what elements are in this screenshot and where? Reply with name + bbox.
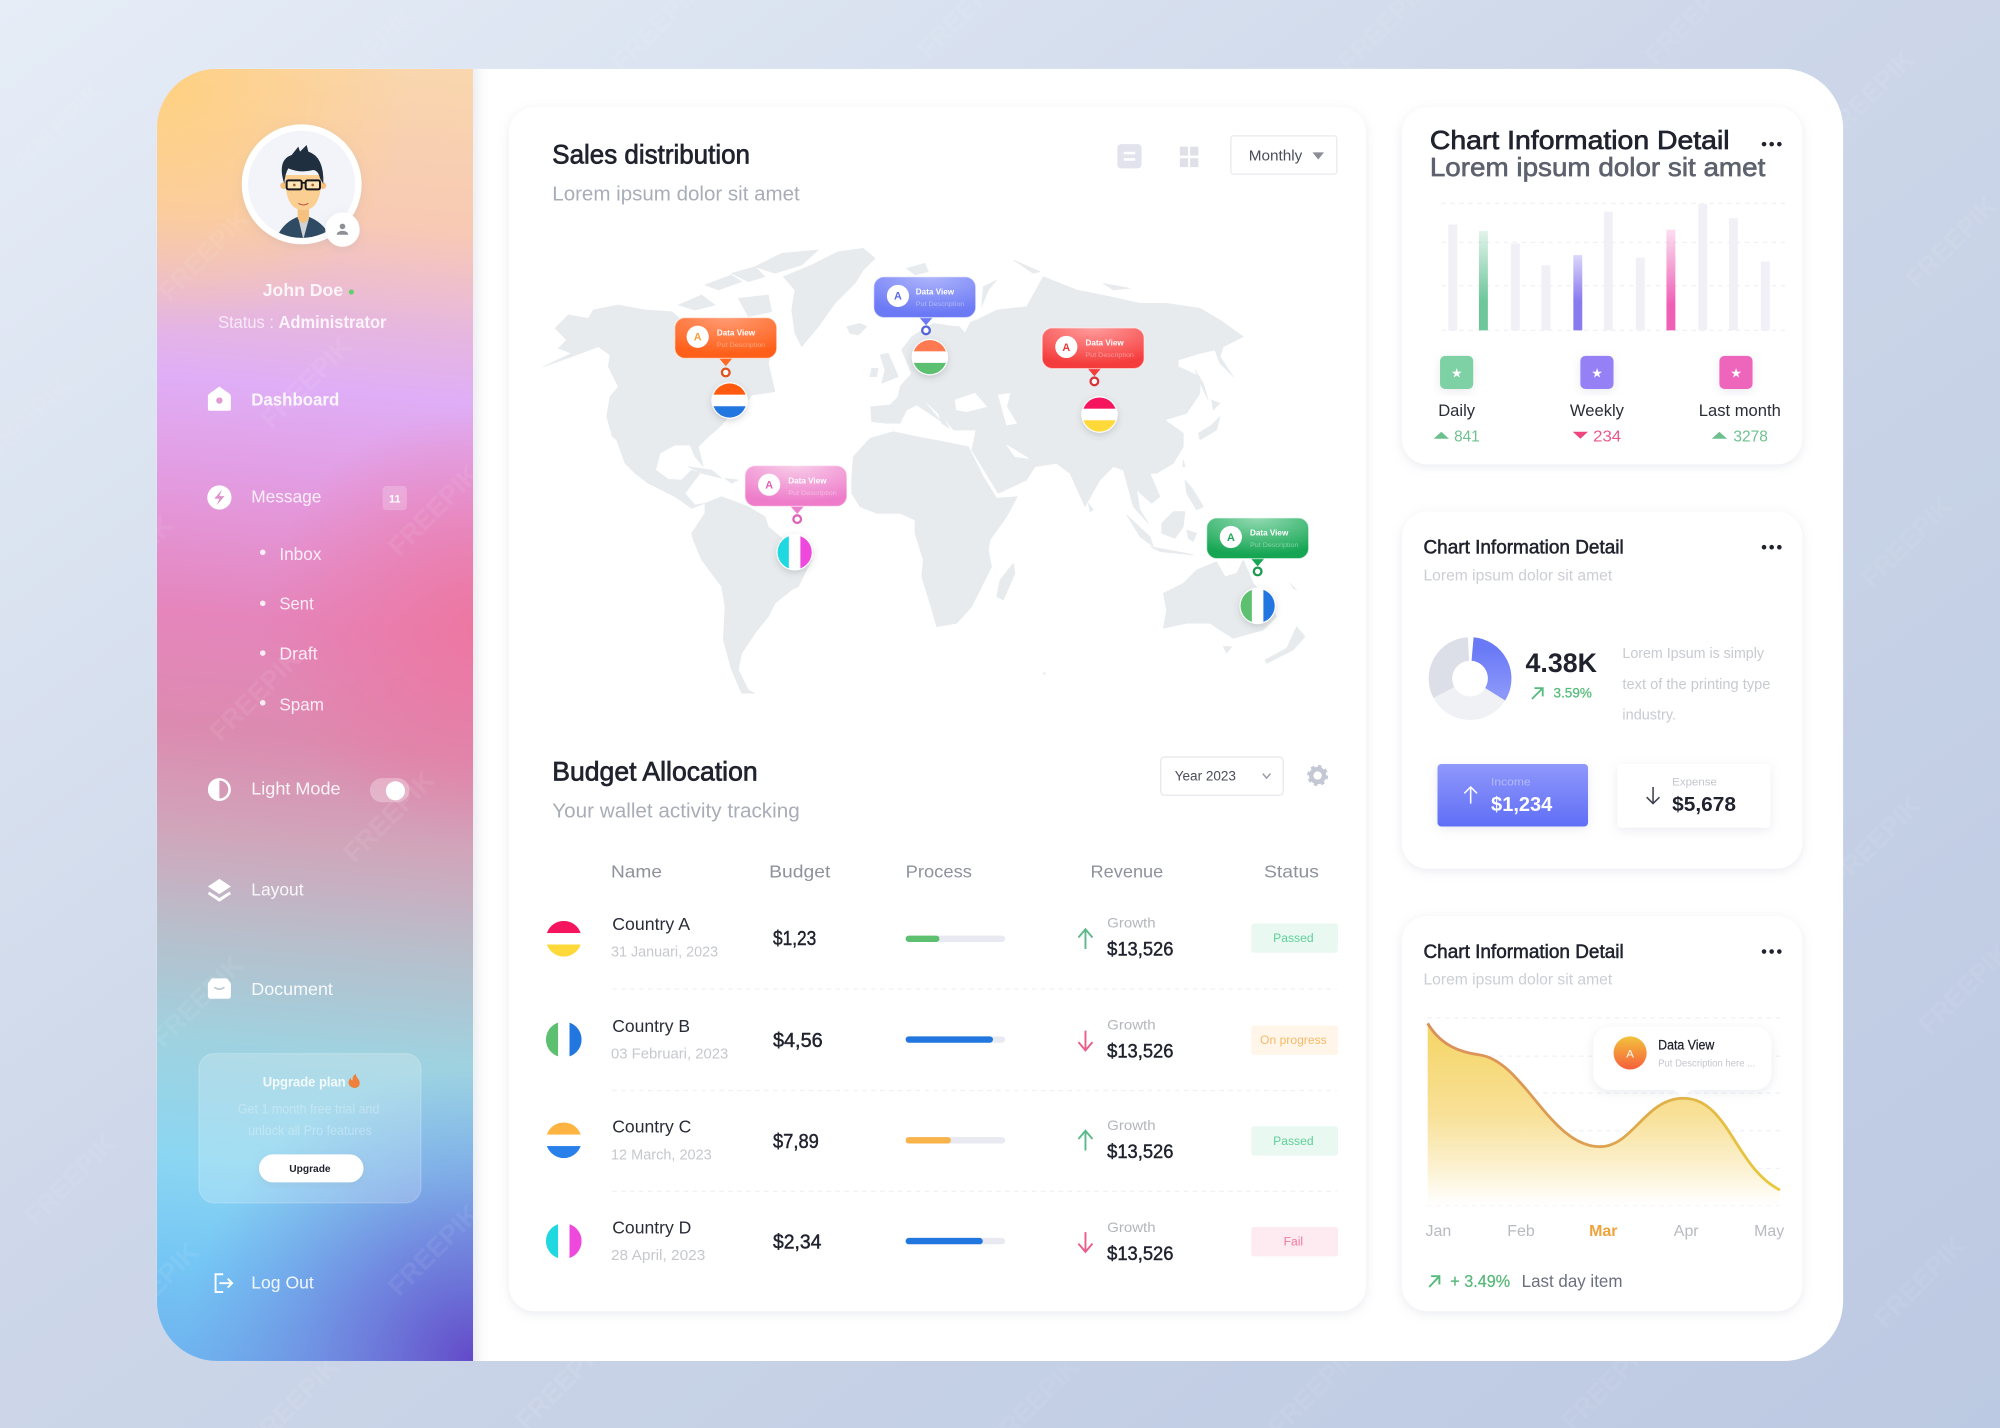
chart tooltip: Data View — [1658, 1038, 1715, 1053]
growth summary — [1429, 1271, 1622, 1291]
legend: last month — [1699, 356, 1781, 445]
table dividers — [612, 989, 1337, 1191]
map pin: orange: Put Description — [717, 342, 766, 349]
donut description — [1622, 646, 1770, 723]
sidebar edge shadow — [473, 69, 491, 1361]
panel: bar chart card — [1402, 107, 1802, 464]
icon: more dots — [1762, 545, 1782, 549]
sidebar — [157, 69, 474, 1361]
monthly dropdown — [1231, 136, 1337, 174]
area card title: Chart Information Detail — [1423, 942, 1624, 963]
nav: layout — [208, 879, 304, 902]
table row: country B — [546, 1020, 1338, 1060]
income button: Income — [1491, 777, 1531, 789]
map pin: pink — [745, 466, 847, 571]
table row: country B: Growth — [1107, 1016, 1156, 1032]
watermark pattern: FREEPIK — [6, 75, 110, 179]
watermark pattern: FREEPIK — [318, 0, 422, 103]
table header: Budget — [769, 862, 830, 882]
map pin: pink: Put Description — [788, 490, 837, 497]
chart tooltip: Put Description here ... — [1658, 1058, 1755, 1069]
table row: country B: $13,526 — [1107, 1041, 1173, 1062]
nav: message: 11 — [389, 494, 400, 506]
table row: country B: Country B — [612, 1016, 690, 1036]
table row: country A: $1,23 — [773, 928, 816, 950]
nav: document: Document — [251, 979, 333, 999]
area chart — [1427, 1018, 1782, 1205]
icon: list view — [1117, 144, 1142, 168]
donut description: industry. — [1622, 707, 1676, 723]
panel: area chart card — [1402, 916, 1802, 1311]
growth summary: Last day item — [1522, 1271, 1622, 1291]
table row: country D: Fail — [1284, 1235, 1303, 1249]
growth summary: + 3.49% — [1450, 1271, 1510, 1291]
heading: sales distribution: Sales distribution — [552, 139, 750, 169]
avatar — [242, 124, 362, 244]
table row: country D: $13,526 — [1107, 1244, 1173, 1265]
legend: daily: ★ — [1451, 366, 1462, 381]
map pin: blue — [874, 277, 976, 375]
upgrade plan card: Get 1 month free trial and — [238, 1102, 379, 1117]
panel: donut card — [1402, 511, 1802, 869]
table row: country A: Growth — [1107, 914, 1156, 930]
map pin: red: Put Description — [1085, 352, 1134, 359]
sidebar: FREEPIK — [255, 331, 358, 434]
legend: daily: 841 — [1454, 428, 1480, 445]
nav: dashboard — [208, 386, 339, 411]
upgrade plan card: Upgrade plan — [263, 1075, 346, 1090]
bar card subtitle: Lorem ipsum dolor sit amet — [1430, 152, 1766, 182]
expense button — [1617, 764, 1770, 828]
x-axis months: Apr — [1674, 1223, 1699, 1240]
table row: country B: $4,56 — [773, 1030, 823, 1052]
table row: country D: Country D — [612, 1217, 691, 1237]
table row: country B: 03 Februari, 2023 — [611, 1047, 728, 1063]
map pin: green: Data View — [1250, 528, 1289, 538]
table row: country C: $13,526 — [1107, 1142, 1173, 1163]
nav: message sub-items — [260, 544, 324, 714]
map pin: orange: Data View — [717, 327, 756, 337]
table header: Process — [906, 862, 972, 882]
legend: last month: ★ — [1730, 366, 1742, 381]
map pin: blue: Data View — [916, 287, 955, 297]
legend: weekly: ★ — [1591, 366, 1603, 381]
income button: $1,234 — [1491, 794, 1553, 816]
watermark pattern: FREEPIK — [1817, 44, 1921, 147]
map pin: green: A — [1227, 532, 1235, 544]
sidebar: FREEPIK — [337, 764, 441, 868]
watermark pattern: FREEPIK — [1855, 490, 1959, 594]
watermark pattern: FREEPIK — [19, 1128, 122, 1231]
main white panel — [157, 69, 1843, 1361]
upgrade plan card: unlock all Pro features — [248, 1123, 372, 1138]
table row: country A: 31 Januari, 2023 — [611, 945, 718, 961]
donut value: 4.38K — [1526, 648, 1598, 678]
icon: more dots — [1762, 142, 1782, 146]
sidebar: FREEPIK — [203, 643, 307, 747]
nav: light mode: Light Mode — [251, 779, 341, 799]
nav: document — [208, 978, 333, 999]
nav: message sub-items: Spam — [279, 694, 324, 714]
table header: Status — [1264, 862, 1319, 882]
table row: country D: 28 April, 2023 — [611, 1248, 705, 1264]
sidebar: FREEPIK — [382, 1198, 486, 1302]
sales subheading: Lorem ipsum dolor sit amet — [552, 183, 800, 205]
map pin: orange — [675, 318, 777, 419]
icon: grid view — [1180, 147, 1198, 167]
expense button: $5,678 — [1672, 794, 1736, 816]
x-axis months: May — [1754, 1223, 1784, 1240]
legend: last month: 3278 — [1733, 428, 1768, 445]
table row: country A: Passed — [1273, 931, 1314, 945]
x-axis months: Jan — [1426, 1223, 1451, 1240]
legend: last month: Last month — [1699, 401, 1781, 420]
map pin: pink: A — [765, 480, 773, 492]
watermark pattern: FREEPIK — [1868, 1230, 1972, 1334]
map pin: orange: A — [694, 332, 702, 344]
budget subheading: Your wallet activity tracking — [552, 801, 800, 823]
table header: Revenue — [1091, 862, 1163, 882]
table row: country A: Country A — [612, 914, 690, 934]
sidebar: FREEPIK — [152, 203, 256, 307]
table row: country C: $7,89 — [773, 1131, 819, 1153]
map pin: blue: A — [894, 291, 902, 303]
icon: settings gear — [1309, 767, 1327, 784]
donut description: text of the printing type — [1622, 677, 1770, 693]
map pin: green — [1207, 518, 1309, 624]
donut card title: Chart Information Detail — [1423, 538, 1624, 559]
nav: log out — [216, 1272, 314, 1292]
sidebar: FREEPIK — [76, 509, 180, 613]
map pin: red — [1042, 328, 1144, 433]
table row: country C: Country C — [612, 1117, 691, 1137]
nav: dashboard: Dashboard — [251, 390, 339, 410]
donut chart — [1440, 649, 1500, 708]
nav: message sub-items: Draft — [279, 643, 318, 663]
donut change: 3.59% — [1554, 686, 1592, 701]
bar chart — [1441, 203, 1786, 330]
chart tooltip: A — [1626, 1048, 1634, 1060]
watermark pattern: FREEPIK — [1823, 790, 1927, 893]
map pin: blue: Put Description — [916, 301, 965, 308]
table row: country C: Passed — [1273, 1134, 1314, 1148]
table header — [611, 862, 1319, 882]
table row: country A: $13,526 — [1107, 939, 1173, 960]
table row: country A — [547, 918, 1338, 958]
donut description: Lorem Ipsum is simply — [1622, 646, 1765, 662]
year dropdown — [1161, 757, 1283, 795]
sidebar: FREEPIK — [146, 949, 250, 1053]
legend: weekly: Weekly — [1570, 401, 1625, 420]
income button — [1438, 764, 1588, 827]
map pin: pink: Data View — [788, 475, 827, 485]
map pin: red: A — [1062, 342, 1070, 354]
table row: country C: 12 March, 2023 — [611, 1147, 712, 1163]
online dot — [349, 290, 354, 295]
panel: sales and budget card — [509, 107, 1366, 1311]
table row: country B: On progress — [1260, 1033, 1327, 1047]
upgrade plan card: Upgrade — [289, 1164, 331, 1175]
table header: Name — [611, 862, 662, 882]
x-axis months: Feb — [1507, 1223, 1535, 1240]
table row: country D — [546, 1222, 1338, 1263]
legend: weekly — [1570, 356, 1625, 445]
monthly dropdown: Monthly — [1249, 149, 1303, 165]
legend: weekly: 234 — [1593, 428, 1622, 445]
table row: country C — [546, 1120, 1338, 1162]
nav: log out: Log Out — [251, 1272, 314, 1292]
table row: country D: Growth — [1107, 1219, 1156, 1235]
nav: layout: Layout — [251, 879, 304, 899]
sidebar: FREEPIK — [382, 458, 486, 562]
upgrade plan card — [199, 1054, 421, 1203]
x-axis months: Mar — [1589, 1223, 1617, 1240]
bar card title: Chart Information Detail — [1430, 125, 1730, 155]
year dropdown: Year 2023 — [1175, 769, 1236, 784]
profile status: Status : Administrator — [218, 312, 387, 332]
sidebar: FREEPIK — [101, 1236, 205, 1340]
area card subtitle: Lorem ipsum dolor sit amet — [1423, 972, 1613, 989]
icon: more dots — [1762, 949, 1782, 954]
nav: light mode — [209, 778, 409, 802]
donut card subtitle: Lorem ipsum dolor sit amet — [1423, 567, 1613, 584]
heading: budget allocation: Budget Allocation — [552, 757, 758, 787]
expense button: Expense — [1672, 777, 1717, 789]
table row: country D: $2,34 — [773, 1232, 821, 1254]
chart tooltip — [1593, 1027, 1772, 1097]
world map — [543, 248, 1305, 693]
nav: message sub-items: Sent — [279, 594, 314, 614]
avatar badge — [325, 212, 360, 247]
map pin: green: Put Description — [1250, 542, 1299, 549]
table row: country C: Growth — [1107, 1117, 1156, 1133]
legend: daily: Daily — [1438, 401, 1476, 420]
nav: message: Message — [251, 487, 321, 507]
map pin: red: Data View — [1085, 338, 1124, 348]
profile name: John Doe — [263, 280, 343, 300]
x-axis months — [1426, 1223, 1784, 1240]
nav: message sub-items: Inbox — [279, 544, 321, 564]
nav: message — [207, 485, 407, 510]
donut change — [1532, 686, 1592, 701]
legend: daily — [1434, 356, 1480, 445]
